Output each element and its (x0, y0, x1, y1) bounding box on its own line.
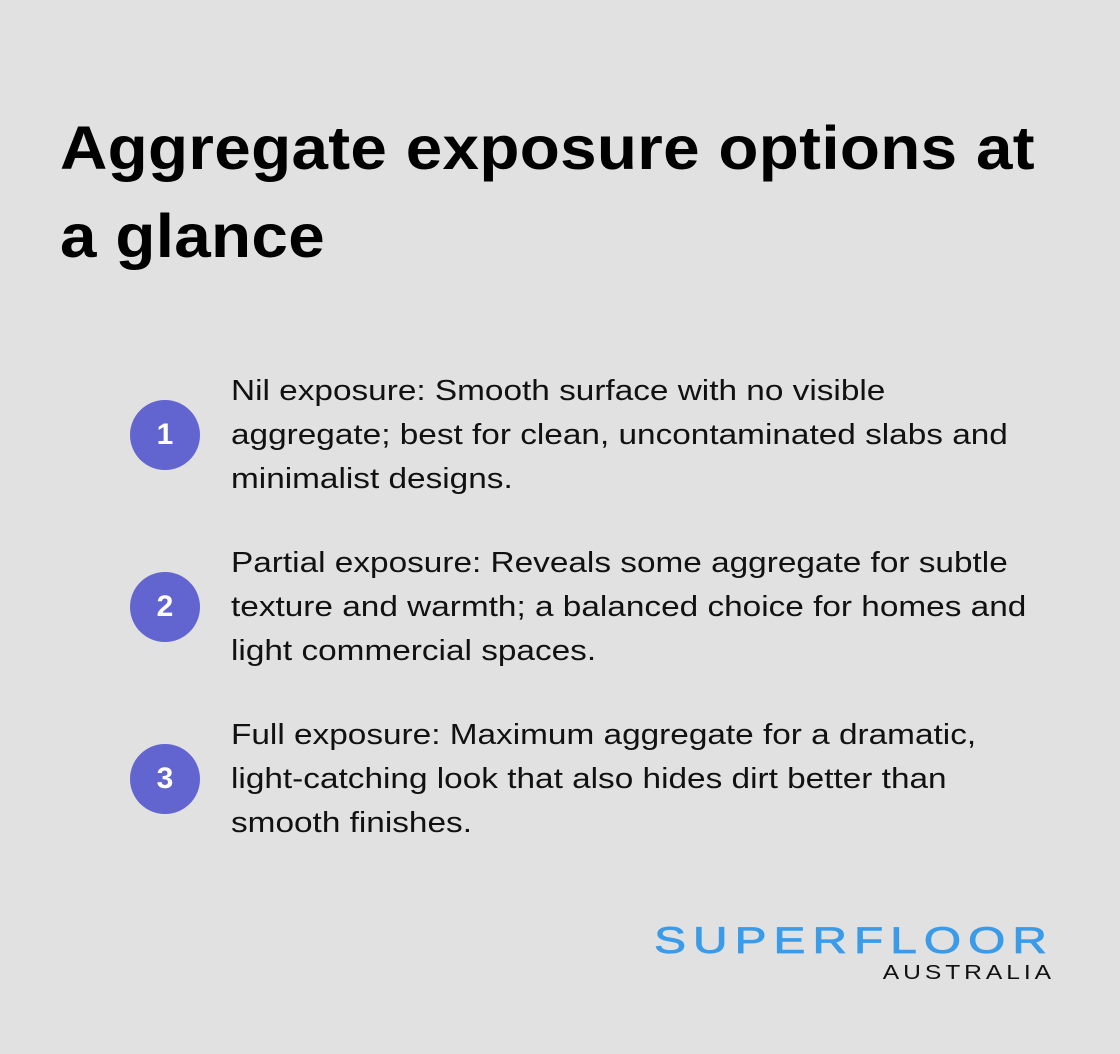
logo subtitle: AUSTRALIA (883, 962, 1055, 984)
badge 1 (130, 400, 200, 470)
text 1: Nil exposure: Smooth surface with no visible (231, 375, 885, 407)
text 3: Full exposure: Maximum aggregate for a dramatic, (231, 719, 976, 751)
text 2 (231, 547, 1026, 667)
text 1: minimalist designs. (231, 463, 513, 495)
text 3: light-catching look that also hides dirt better than (231, 763, 947, 795)
text 3: smooth finishes. (231, 807, 472, 839)
logo (654, 920, 1055, 984)
title: Aggregate exposure options at (60, 114, 1035, 182)
badge 2: 2 (157, 590, 173, 623)
text 2: texture and warmth; a balanced choice for homes and (231, 591, 1026, 623)
badge 3 (130, 744, 200, 814)
title: a glance (60, 202, 325, 270)
text 2: light commercial spaces. (231, 635, 596, 667)
badge 3: 3 (157, 762, 173, 795)
text 2: Partial exposure: Reveals some aggregate for subtle (231, 547, 1008, 579)
title (60, 114, 1035, 270)
logo wordmark: SUPERFLOOR (654, 920, 1054, 961)
item 1 (130, 375, 1008, 495)
text 1 (231, 375, 1008, 495)
item 3 (130, 719, 976, 839)
text 3 (231, 719, 976, 839)
badge 1: 1 (157, 418, 173, 451)
item 2 (130, 547, 1026, 667)
text 1: aggregate; best for clean, uncontaminated slabs and (231, 419, 1008, 451)
badge 2 (130, 572, 200, 642)
